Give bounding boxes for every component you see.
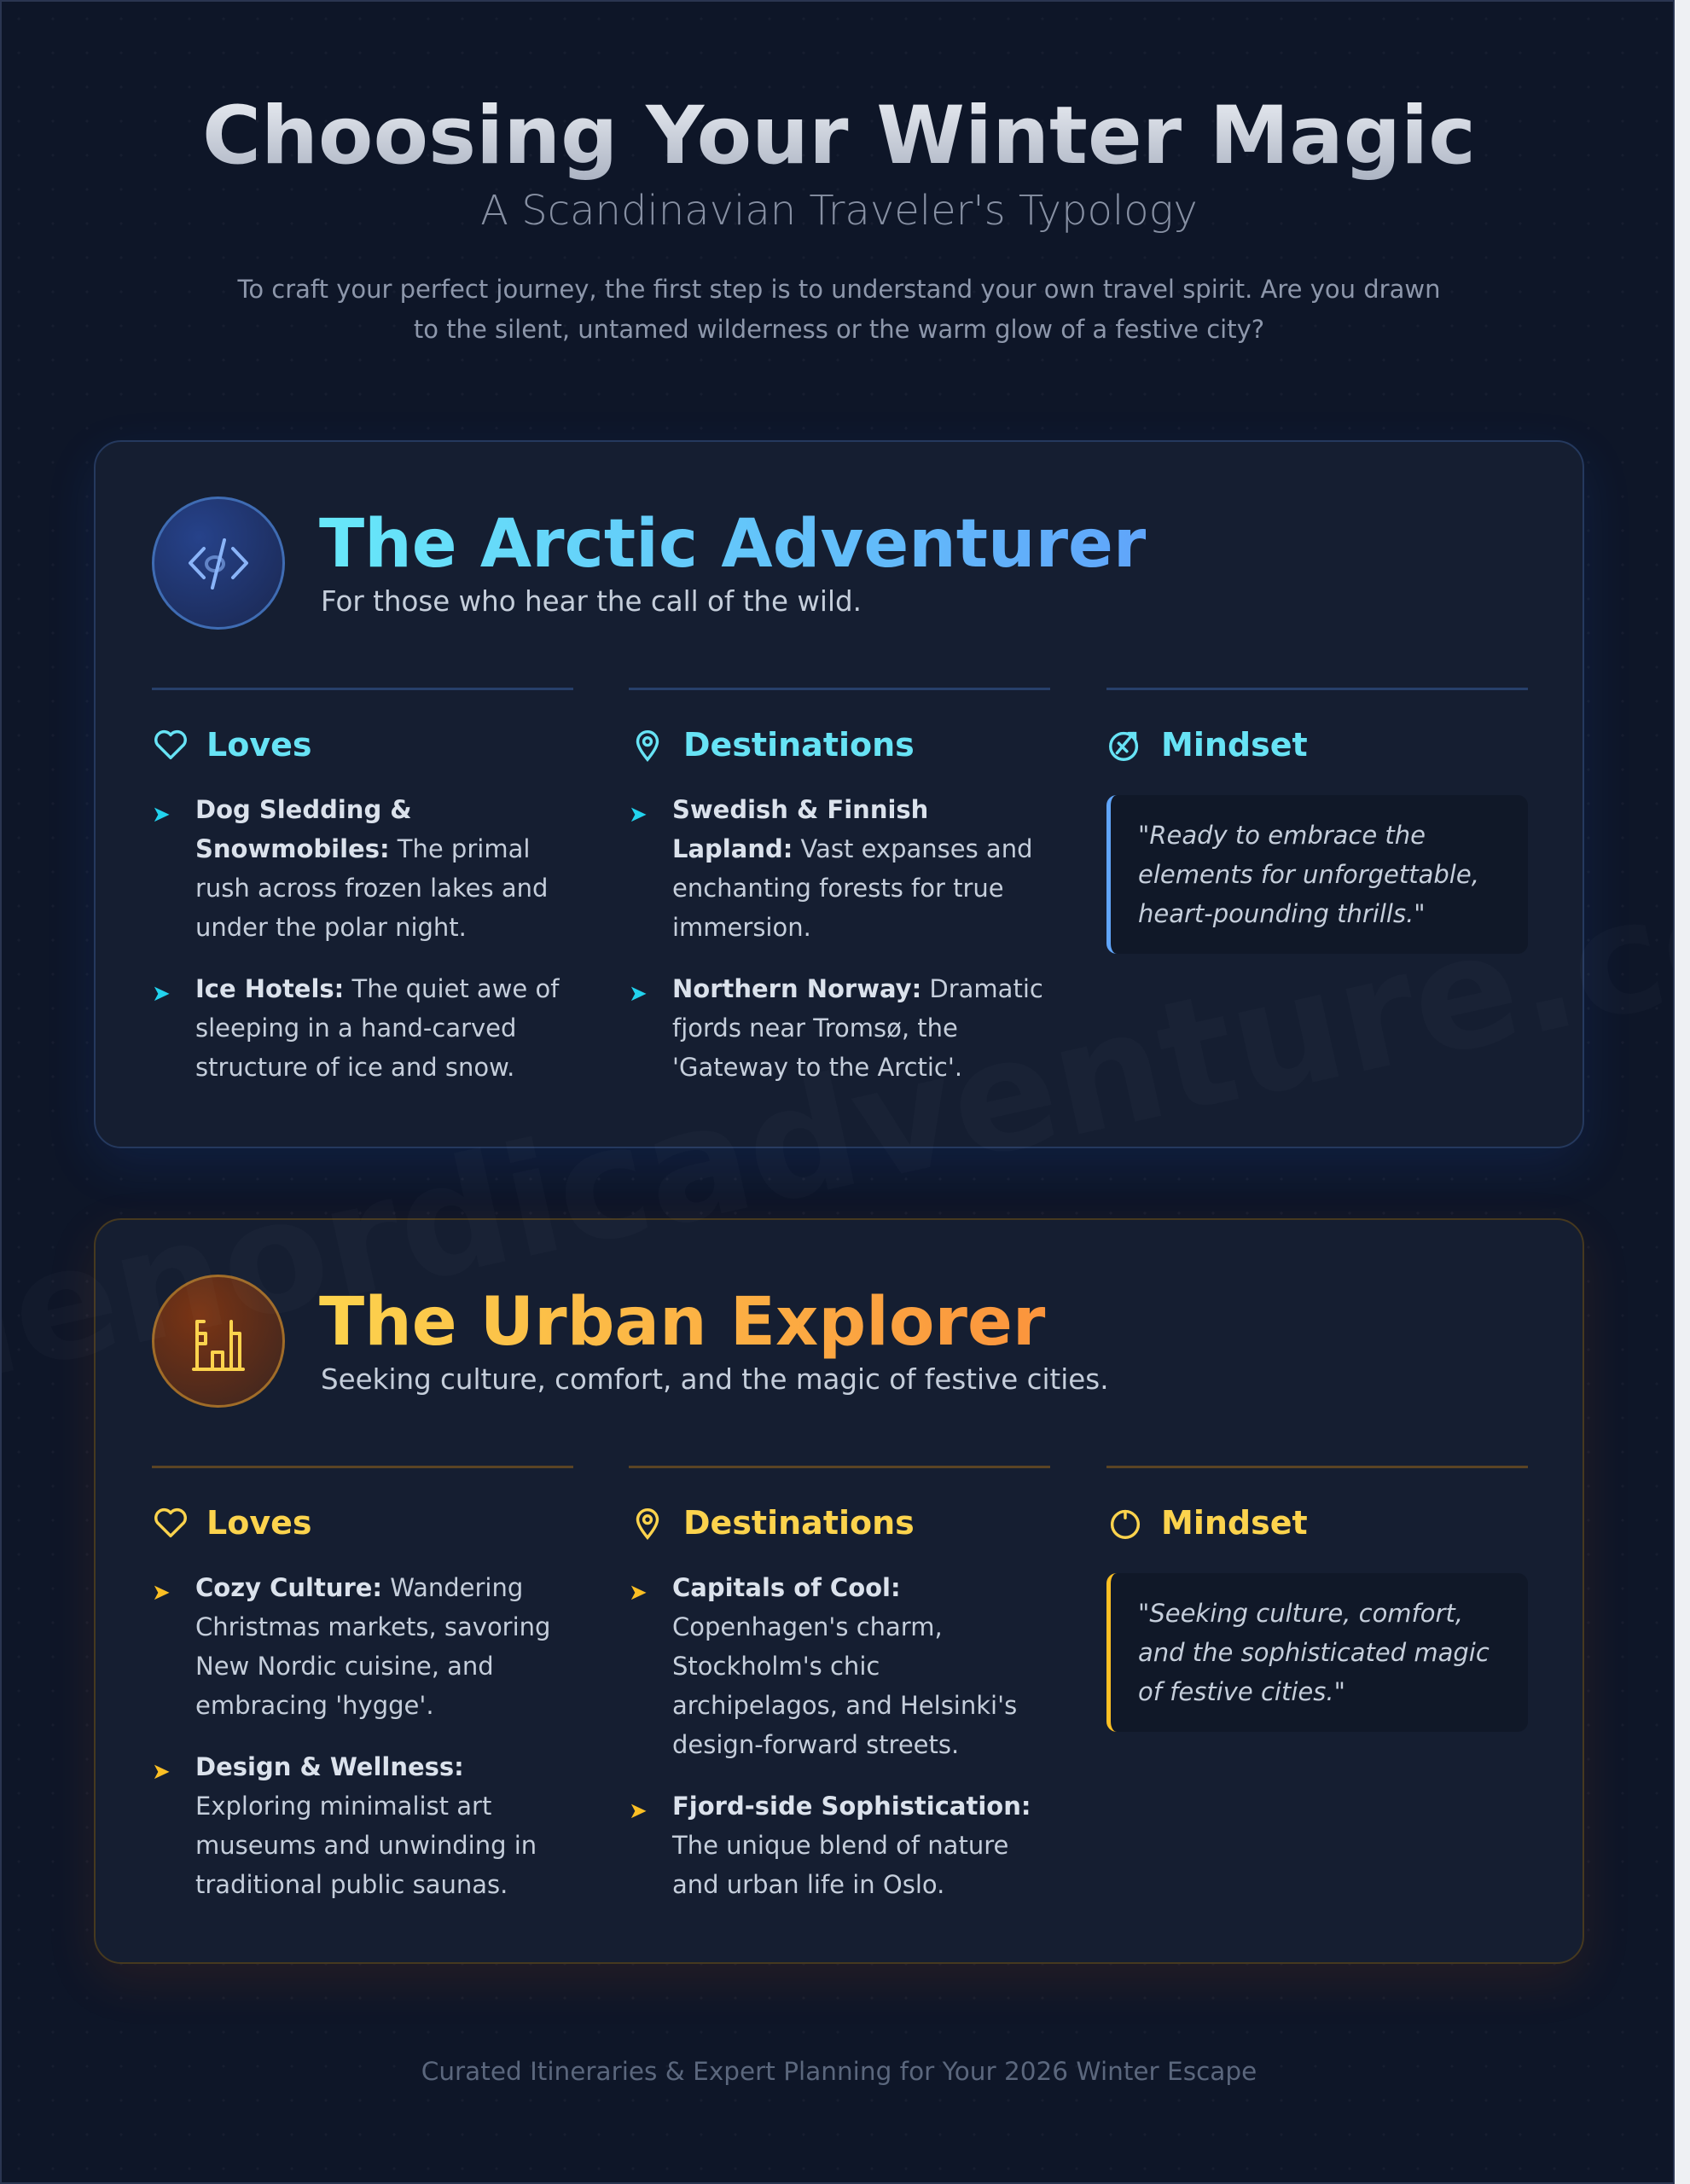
- quote: urban: "Seeking culture, comfort, and the sophisticated magic of festive cities.": [1138, 1599, 1490, 1706]
- list: destinations: ➤: [629, 802, 648, 828]
- list: loves: Dog Sledding & Snowmobiles: The primal rush across frozen lakes and under the polar night.: [195, 795, 548, 942]
- list: destinations: Swedish & Finnish Lapland: Vast expanses and enchanting forests for true immersion.: [672, 795, 1032, 942]
- list: destinations: Northern Norway: Dramatic fjords near Tromsø, the 'Gateway to the Arctic'.: [672, 974, 1043, 1082]
- footer: Curated Itineraries & Expert Planning for Your 2026 Winter Escape: [421, 2057, 1257, 2086]
- list: loves: Cozy Culture: Wandering Christmas markets, savoring New Nordic cuisine, and embracing 'hygge'.: [195, 1573, 550, 1720]
- panel: urban explorer: Destinations: [683, 1504, 915, 1542]
- tagline: urban: Seeking culture, comfort, and the magic of festive cities.: [321, 1363, 1109, 1396]
- panel: arctic adventurer: [94, 440, 1584, 1148]
- list: destinations: Fjord-side Sophistication: The unique blend of nature and urban life in Oslo.: [672, 1792, 1031, 1899]
- list: destinations: [629, 1573, 1031, 1899]
- quote: arctic: [1106, 795, 1528, 954]
- column: mindset: [1106, 688, 1528, 954]
- list: destinations: [629, 795, 1043, 1082]
- title: Choosing Your Winter Magic: [202, 90, 1476, 183]
- panel: urban explorer: Loves: [206, 1504, 311, 1542]
- panel: arctic adventurer: Loves: [206, 726, 311, 764]
- list: loves: ➤: [152, 802, 171, 828]
- list: loves: ➤: [152, 981, 171, 1007]
- heading: mindset: [1109, 726, 1308, 764]
- intro text: To craft your perfect journey, the first step is to understand your own travel spirit. Are you drawn to the silent, untamed wilderness or the warm glow of a festive city?: [238, 275, 1440, 344]
- panel: urban explorer: [94, 1218, 1584, 1964]
- quote: urban: [1106, 1573, 1528, 1732]
- heading: destinations: [636, 726, 915, 764]
- panel: arctic adventurer: Destinations: [683, 726, 915, 764]
- list: loves: [152, 795, 560, 1082]
- list: destinations: Capitals of Cool: Copenhagen's charm, Stockholm's chic archipelagos, and Helsinki's design-forward streets.: [672, 1573, 1017, 1759]
- subtitle: A Scandinavian Traveler's Typology: [480, 187, 1198, 235]
- panel: arctic adventurer: Mindset: [1161, 726, 1308, 764]
- list: loves: Ice Hotels: The quiet awe of sleeping in a hand-carved structure of ice and snow.: [195, 974, 559, 1082]
- heading: arctic: The Arctic Adventurer: [319, 506, 1146, 583]
- panel: urban explorer: Mindset: [1161, 1504, 1308, 1542]
- column: loves: [152, 688, 573, 1082]
- list: loves: ➤: [152, 1759, 171, 1785]
- column: destinations: [629, 688, 1050, 1082]
- heading: loves: [154, 1504, 311, 1542]
- list: loves: Design & Wellness: Exploring minimalist art museums and unwinding in traditional public saunas.: [195, 1752, 537, 1899]
- heading: urban: The Urban Explorer: [319, 1284, 1045, 1361]
- heading: destinations: [636, 1504, 915, 1542]
- heading: loves: [154, 726, 311, 764]
- column: loves: [152, 1466, 573, 1899]
- column: mindset: [1106, 1466, 1528, 1732]
- list: destinations: ➤: [629, 1798, 648, 1824]
- quote: arctic: "Ready to embrace the elements for unforgettable, heart-pounding thrills.": [1138, 821, 1479, 928]
- icon: urban city: [152, 1275, 285, 1408]
- heading: mindset: [1111, 1504, 1308, 1542]
- list: loves: ➤: [152, 1580, 171, 1606]
- icon: arctic circle: [152, 497, 285, 630]
- list: loves: [152, 1573, 550, 1899]
- title: [2, 85, 1676, 188]
- list: destinations: ➤: [629, 1580, 648, 1606]
- list: destinations: ➤: [629, 981, 648, 1007]
- tagline: arctic: For those who hear the call of the wild.: [321, 585, 862, 618]
- column: destinations: [629, 1466, 1050, 1899]
